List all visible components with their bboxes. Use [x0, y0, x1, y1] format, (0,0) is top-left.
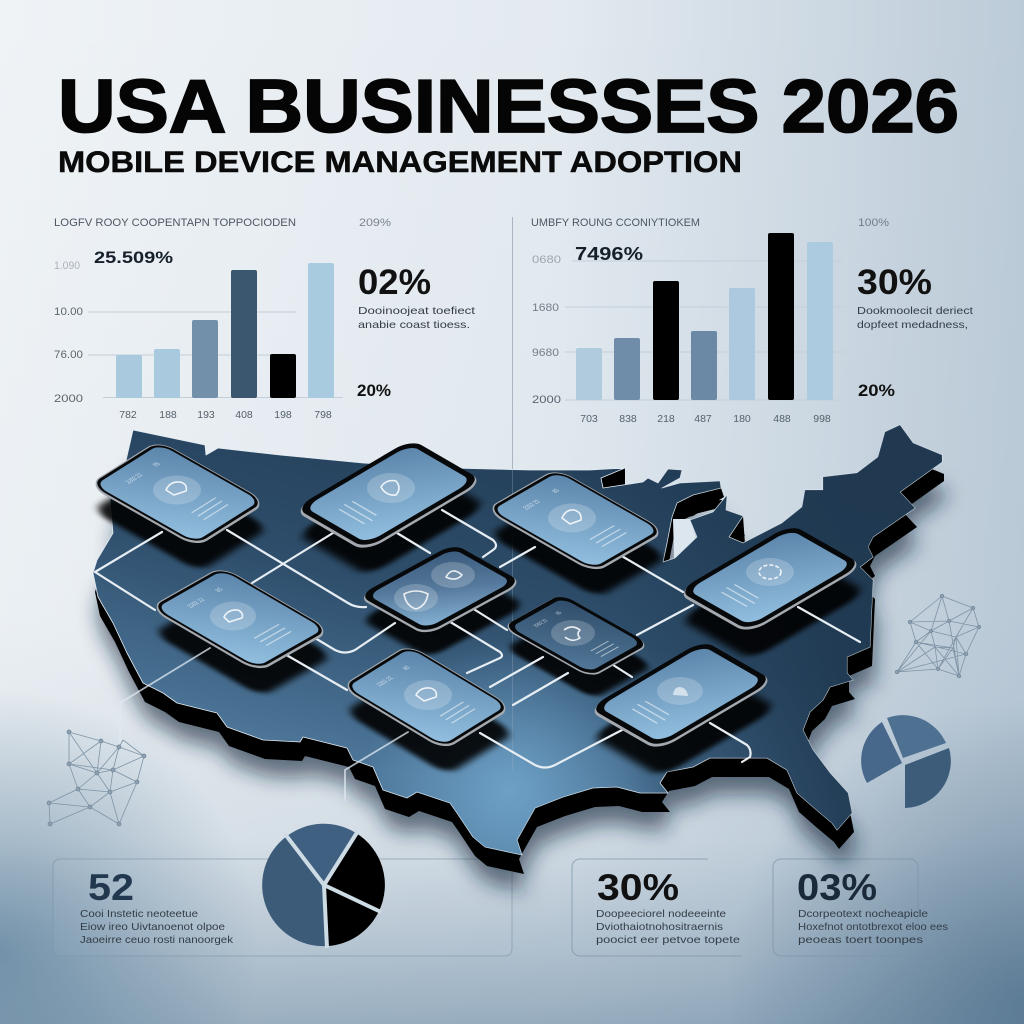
x axis labels: 408: [235, 409, 253, 421]
y axis labels: [532, 254, 561, 406]
phone shadows: [91, 464, 867, 777]
description: [798, 908, 948, 946]
x axis labels: 703: [580, 413, 598, 425]
x axis labels: 798: [314, 409, 332, 421]
x axis labels: 998: [813, 413, 831, 425]
description: [80, 908, 234, 946]
description: Hoxefnot ontotbrexot eloo ees: [798, 921, 948, 933]
y axis labels: 1680: [532, 302, 559, 314]
stat description: anabie coast tioess.: [358, 319, 470, 331]
phone 9: [339, 644, 514, 750]
phone 3: 85: [551, 488, 562, 494]
x axis labels: 193: [197, 409, 215, 421]
map of the USA: [93, 425, 946, 891]
title: USA BUSINESSES 2026: [58, 64, 959, 148]
chart value: 25.509%: [94, 248, 173, 267]
panel: summary box 52: [53, 859, 512, 956]
stat description: dopfeet medadness,: [857, 319, 968, 331]
stat 02%: 02%: [358, 263, 431, 302]
stat description: Dooinoojeat toefiect: [358, 305, 475, 317]
stat 03%: 03%: [797, 867, 877, 908]
x axis labels: 782: [119, 409, 137, 421]
x axis labels: 218: [657, 413, 675, 425]
chart heading: UMBFY ROUNG CCONIYTIOKEM: [531, 217, 700, 229]
bars: [576, 233, 833, 400]
phone 2: [292, 439, 484, 552]
y axis labels: 1.090: [54, 260, 80, 272]
y axis labels: 2000: [54, 393, 83, 405]
phone 6: 85: [554, 610, 564, 616]
phone 3: [484, 468, 667, 573]
panel: summary box 03%: [773, 859, 948, 956]
description: Dviothaiotnohositraernis: [596, 921, 723, 933]
phone 5: 2202 22: [187, 598, 207, 609]
phone 1: [87, 440, 268, 547]
x axis labels: 180: [733, 413, 751, 425]
stat description: [857, 305, 973, 331]
description: poocict eer petvoe topete: [596, 934, 740, 946]
x axis labels: [580, 413, 831, 425]
y axis labels: [54, 260, 83, 405]
panel: summary box 30%: [572, 859, 742, 956]
chart heading: LOGFV ROOY COOPENTAPN TOPPOCIODEN: [54, 217, 296, 229]
bars: [116, 263, 334, 398]
description: peoeas toert toonpes: [798, 934, 923, 946]
chart value: 7496%: [575, 244, 643, 264]
phone 6: 2202 22: [532, 618, 550, 629]
stat 30%: 30%: [857, 263, 932, 302]
stat 30%: 30%: [597, 867, 679, 908]
stat 20%: 20%: [357, 382, 391, 400]
connector lines: [95, 510, 860, 800]
phone 8: [586, 640, 775, 751]
x axis labels: 198: [274, 409, 292, 421]
description: [596, 908, 740, 946]
panel: left bar chart: [54, 217, 475, 421]
description: Eiow ireo Uivtanoenot olpoe: [80, 921, 225, 933]
description: Jaoeirre ceuo rosti nanoorgek: [80, 934, 234, 946]
y axis labels: 2000: [532, 394, 561, 406]
panel: right bar chart: [531, 217, 973, 425]
x axis labels: 838: [619, 413, 637, 425]
phone 9: 2202 22: [376, 676, 395, 688]
phone 4: [356, 544, 524, 636]
description: Cooi Instetic neoteetue: [80, 908, 198, 920]
x axis labels: 487: [694, 413, 712, 425]
chart scale label: 100%: [858, 217, 889, 229]
description: Dcorpeotext nocheapicle: [798, 908, 928, 920]
stat 52: 52: [88, 867, 134, 908]
x axis labels: 188: [159, 409, 177, 421]
phone 6: [501, 594, 651, 678]
pie chart: bottom centre: [262, 824, 385, 948]
phone 7: [675, 524, 864, 634]
stat description: Dookmoolecit deriect: [857, 305, 973, 317]
phone 1: 85: [152, 461, 163, 468]
description: Doopeeciorel nodeeeinte: [596, 908, 726, 920]
network: left: [47, 730, 146, 826]
y axis labels: 10.00: [54, 306, 83, 318]
x axis labels: 488: [773, 413, 791, 425]
y axis labels: 0680: [532, 254, 561, 266]
stat 20%: 20%: [858, 382, 895, 400]
stat description: [358, 305, 475, 331]
phone 5: [148, 566, 332, 672]
x axis labels: [119, 409, 332, 421]
phone 5: 85: [215, 587, 226, 593]
phone 3: 2202 22: [522, 499, 543, 511]
pie chart: right: [861, 715, 951, 808]
subtitle: MOBILE DEVICE MANAGEMENT ADOPTION: [58, 146, 742, 179]
chart scale label: 209%: [359, 217, 391, 229]
y axis labels: 9680: [532, 347, 559, 359]
y axis labels: 76.00: [54, 349, 83, 361]
phone 9: 85: [402, 665, 412, 672]
network: right: [895, 594, 981, 678]
phone 1: 2202 22: [125, 473, 145, 485]
